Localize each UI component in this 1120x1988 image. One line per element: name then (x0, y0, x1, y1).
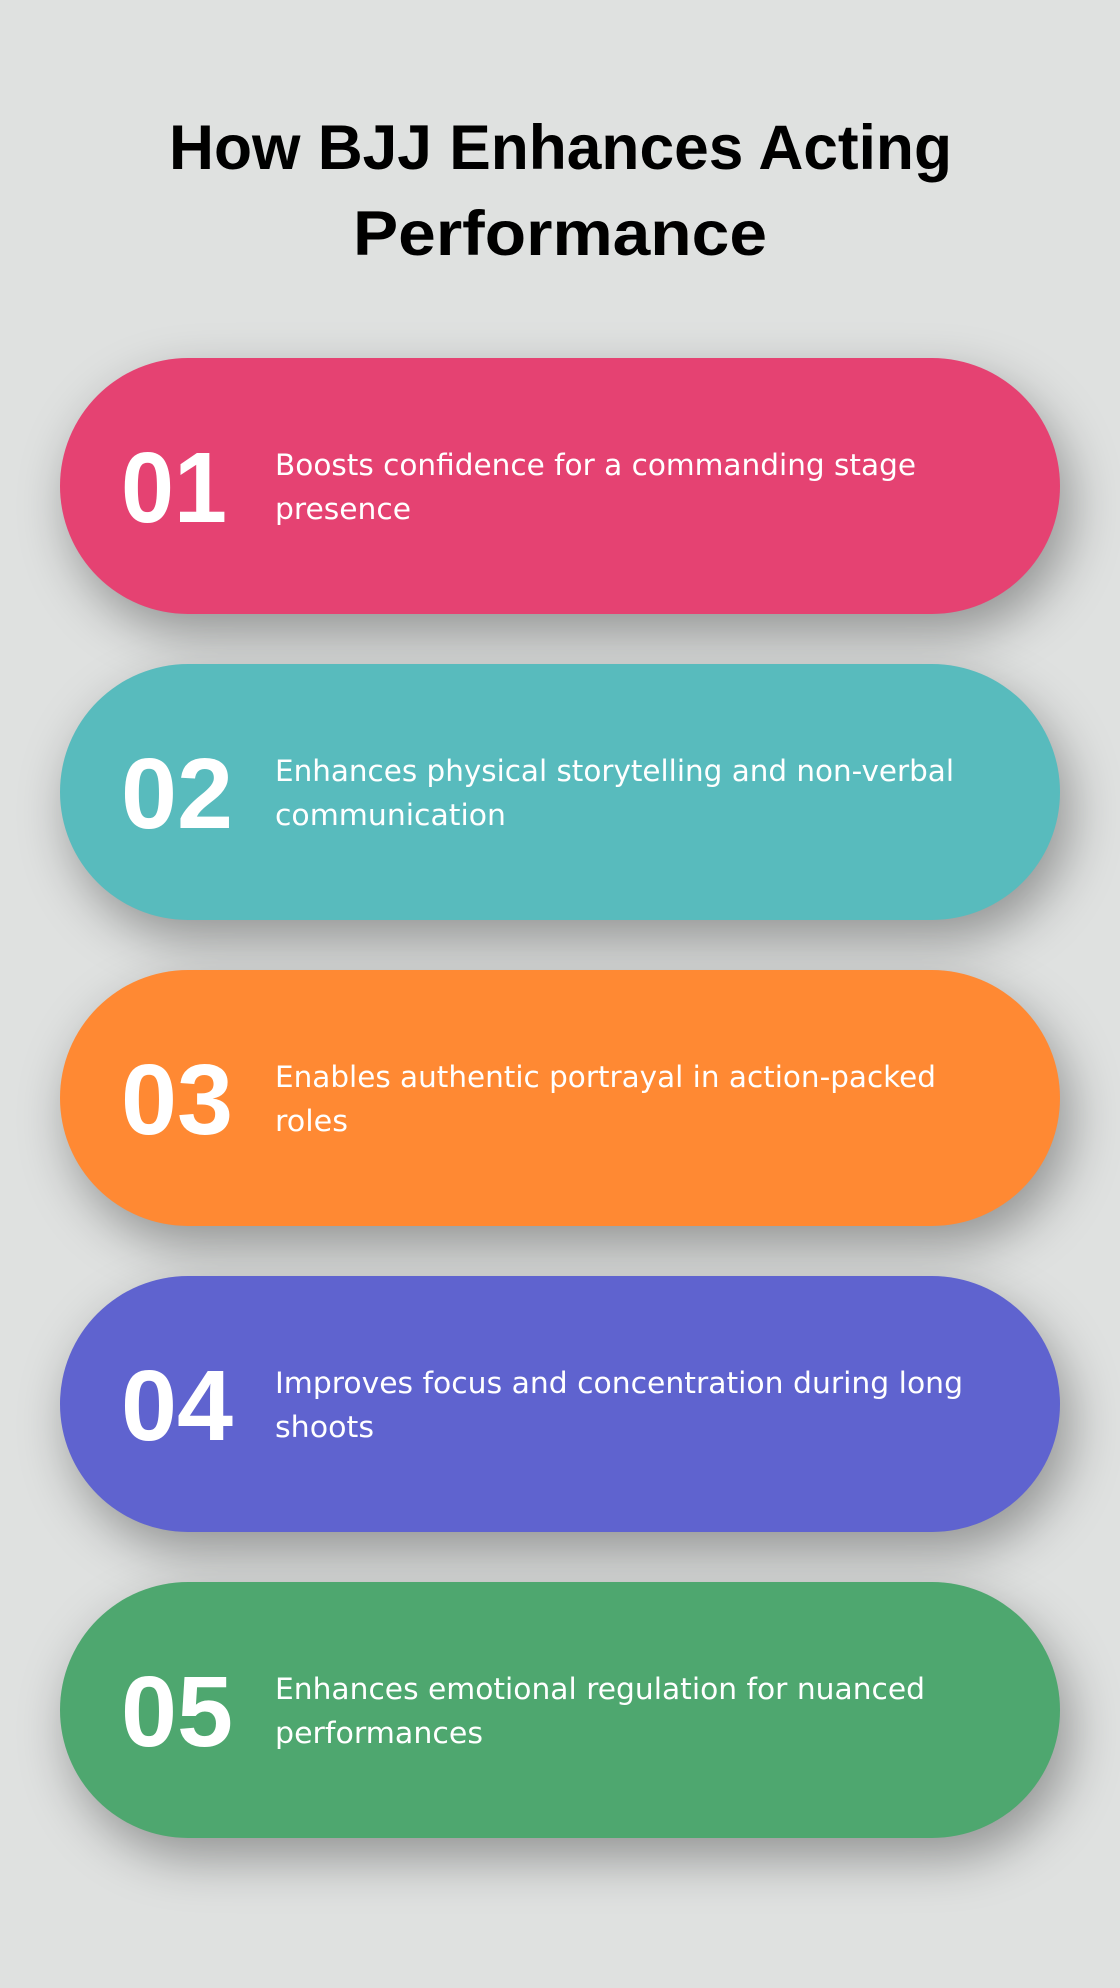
text: item 04: shoots (275, 1410, 374, 1444)
title: How BJJ Enhances Acting (169, 113, 952, 183)
text: item 03: roles (275, 1104, 348, 1138)
text: item 05 (275, 1672, 925, 1750)
text: item 05: Enhances emotional regulation for nuanced (275, 1672, 925, 1706)
panel: item 05 (60, 1582, 1060, 1838)
text: item 02: Enhances physical storytelling and non-verbal (275, 754, 954, 788)
number 02: 02 (121, 738, 233, 850)
text: item 03 (275, 1060, 936, 1138)
text: item 01: presence (275, 492, 411, 526)
number 04: 04 (121, 1350, 233, 1462)
text: item 02: communication (275, 798, 506, 832)
title: Performance (353, 199, 767, 269)
text: item 04: Improves focus and concentration during long (275, 1366, 963, 1400)
number 05: 05 (121, 1656, 233, 1768)
number 01: 01 (121, 432, 227, 544)
text: item 04 (275, 1366, 963, 1444)
text: item 02 (275, 754, 954, 832)
text: item 05: performances (275, 1716, 483, 1750)
panel: item 01 (60, 358, 1060, 614)
text: item 03: Enables authentic portrayal in action-packed (275, 1060, 936, 1094)
panel: item 03 (60, 970, 1060, 1226)
title (169, 113, 952, 269)
panel: item 04 (60, 1276, 1060, 1532)
panel: item 02 (60, 664, 1060, 920)
text: item 01 (275, 448, 916, 526)
number 03: 03 (121, 1044, 233, 1156)
text: item 01: Boosts confidence for a commanding stage (275, 448, 916, 482)
